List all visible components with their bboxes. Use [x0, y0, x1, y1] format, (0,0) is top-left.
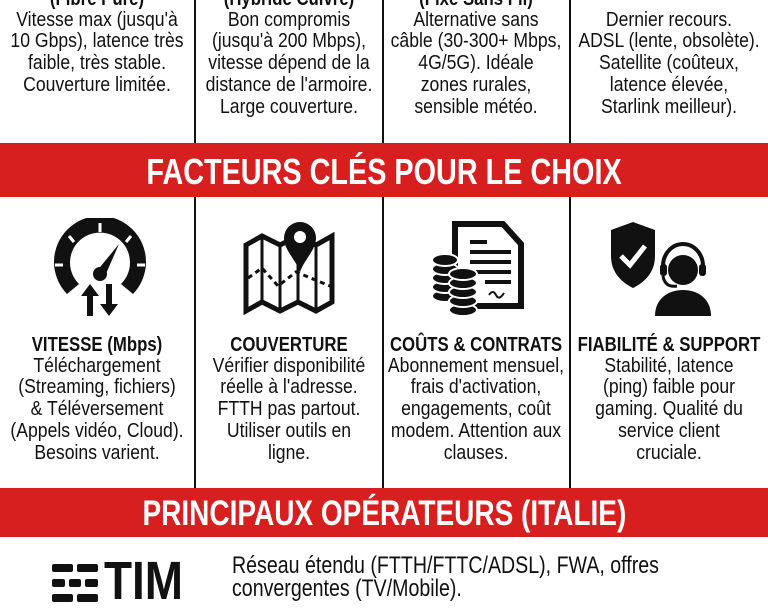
- panel: hybride cuivre: Bon compromis: [228, 9, 350, 31]
- panel: vitesse: VITESSE (Mbps): [32, 333, 162, 356]
- panel: couverture: Vérifier disponibilité: [213, 355, 365, 377]
- panel: autres: [578, 9, 760, 118]
- panel: fibre pure: Couverture limitée.: [23, 74, 171, 96]
- logo: TIM: TIM: [104, 551, 183, 611]
- panel: coûts: clauses.: [444, 442, 508, 464]
- icon: map: [244, 222, 334, 316]
- panel: couverture: FTTH pas partout.: [218, 398, 360, 420]
- text: TIM description: Réseau étendu (FTTH/FTTC/ADSL), FWA, offres: [232, 552, 659, 579]
- panel: coûts: COÛTS & CONTRATS: [390, 333, 562, 356]
- panel: fibre pure: Vitesse max (jusqu'à: [16, 9, 178, 31]
- panel: fixe sans fil: Alternative sans: [413, 9, 539, 31]
- panel: fixe sans fil: câble (30-300+ Mbps,: [391, 30, 561, 52]
- heading: facteurs clés: FACTEURS CLÉS POUR LE CHOIX: [146, 151, 622, 192]
- panel: fiabilité: Stabilité, latence: [604, 355, 734, 377]
- panel: fiabilité: cruciale.: [636, 442, 702, 464]
- icon: shield and support agent: [611, 222, 711, 316]
- panel: autres: Dernier recours.: [606, 9, 732, 31]
- panel: vitesse: (Streaming, fichiers): [18, 376, 176, 398]
- panel: vitesse: (Appels vidéo, Cloud).: [10, 420, 184, 442]
- text: TIM description: convergentes (TV/Mobile).: [232, 575, 462, 602]
- panel: fixe sans fil: zones rurales,: [421, 74, 531, 96]
- panel: fiabilité: FIABILITÉ & SUPPORT: [578, 333, 760, 356]
- panel: hybride cuivre: (jusqu'à 200 Mbps),: [212, 30, 366, 52]
- panel: couverture: COUVERTURE: [230, 333, 348, 356]
- panel: fiabilité: [578, 333, 760, 464]
- panel: fibre pure: [10, 0, 184, 96]
- panel: hybride cuivre: Large couverture.: [220, 96, 358, 118]
- panel: vitesse: Besoins varient.: [34, 442, 160, 464]
- logo: TIM: [52, 551, 183, 611]
- panel: autres: Satellite (coûteux,: [599, 52, 739, 74]
- panel: fiabilité: gaming. Qualité du: [595, 398, 743, 420]
- panel: coûts: frais d'activation,: [411, 376, 541, 398]
- panel: vitesse: Téléchargement: [33, 355, 161, 377]
- panel: fiabilité: (ping) faible pour: [603, 376, 735, 398]
- panel: coûts: modem. Attention aux: [391, 420, 561, 442]
- panel: hybride cuivre: distance de l'armoire.: [206, 74, 372, 96]
- panel: autres: latence élevée,: [610, 74, 728, 96]
- heading: facteurs clés: [0, 143, 768, 197]
- panel: fibre pure: 10 Gbps), latence très: [10, 30, 184, 52]
- panel: fiabilité: service client: [618, 420, 720, 442]
- panel: fixe sans fil: [391, 0, 561, 118]
- panel: autres: ADSL (lente, obsolète).: [578, 30, 760, 52]
- panel: coûts: [388, 332, 564, 464]
- panel: autres: Starlink meilleur).: [601, 96, 737, 118]
- panel: couverture: [212, 333, 365, 464]
- heading: principaux opérateurs: PRINCIPAUX OPÉRATEURS (ITALIE): [142, 494, 626, 533]
- panel: fixe sans fil: sensible météo.: [414, 96, 538, 118]
- heading: principaux opérateurs: [0, 488, 768, 537]
- panel: couverture: réelle à l'adresse.: [220, 376, 358, 398]
- text: TIM description: [232, 552, 659, 602]
- panel: hybride cuivre: vitesse dépend de la: [208, 52, 370, 74]
- panel: coûts: engagements, coût: [401, 398, 551, 420]
- panel: couverture: Utiliser outils en: [227, 420, 351, 442]
- panel: hybride cuivre: [206, 0, 372, 118]
- panel: vitesse: [10, 333, 184, 464]
- panel: vitesse: & Téléversement: [31, 398, 163, 420]
- panel: fixe sans fil: 4G/5G). Idéale: [418, 52, 534, 74]
- panel: couverture: ligne.: [268, 442, 310, 464]
- icon: coins and contract: [433, 221, 524, 315]
- panel: coûts: Abonnement mensuel,: [388, 355, 564, 377]
- icon: speedometer: [54, 218, 146, 316]
- panel: fibre pure: faible, très stable.: [28, 52, 166, 74]
